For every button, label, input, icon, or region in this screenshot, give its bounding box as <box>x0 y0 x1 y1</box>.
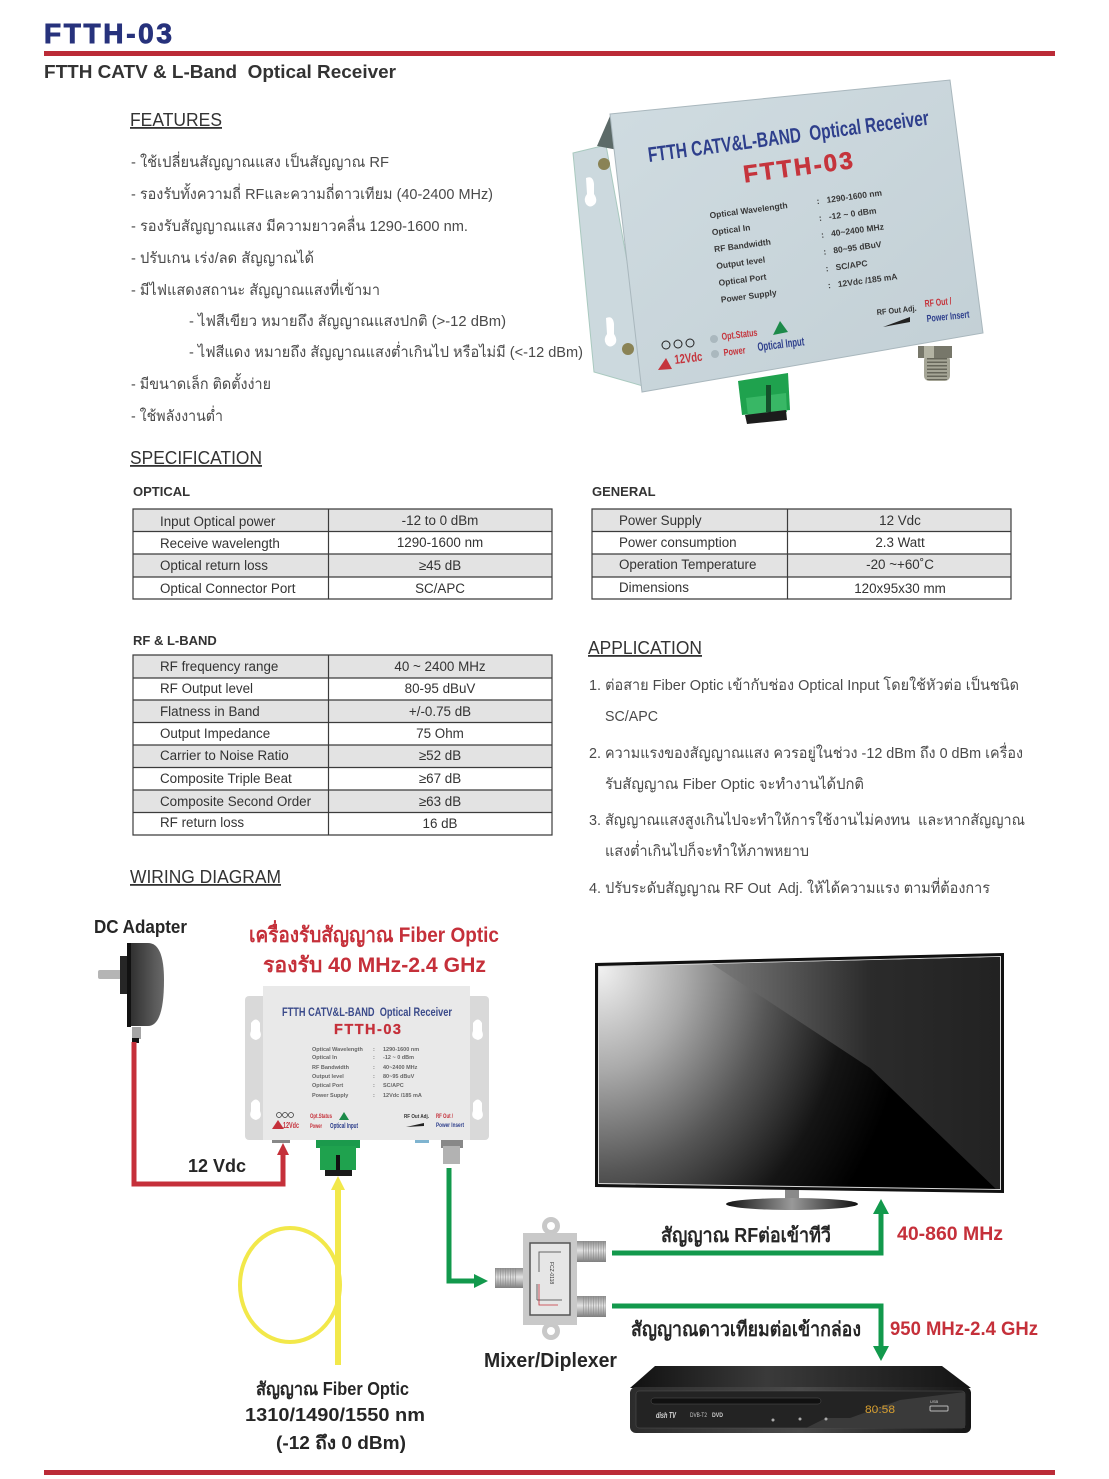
table: rf and l-band: 80-95 dBuV <box>405 681 475 696</box>
printed panel text: Output level <box>716 255 766 271</box>
table: rf and l-band: RF return loss <box>160 815 244 830</box>
table: rf and l-band: 75 Ohm <box>416 726 464 741</box>
heading: receiver caption: เครื่องรับสัญญาณ Fiber Optic <box>249 919 499 948</box>
icon: set top box: 80:58 <box>865 1404 895 1416</box>
panel labels: 12Vdc, status, input: RF Out Adj. <box>876 304 917 317</box>
table: optical: 1290-1600 nm <box>397 535 483 550</box>
title: FTTH-03: FTTH-03 <box>44 18 172 49</box>
printed panel text: Optical Wavelength <box>709 200 788 220</box>
table: optical: SC/APC <box>415 581 465 596</box>
feature list: - มีไฟแสดงสถานะ สัญญาณแสงที่เข้ามา <box>131 279 380 299</box>
panel labels: 12Vdc, status, input: RF Out / <box>924 296 952 310</box>
label: mixer diplexer: Mixer/Diplexer <box>484 1350 617 1372</box>
printed panel text: Optical In <box>711 222 751 237</box>
printed panel text <box>647 107 949 312</box>
application steps: SC/APC <box>605 708 658 725</box>
icon: set top box: DVD <box>712 1413 724 1419</box>
device: optical receiver front view: Optical Input <box>330 1123 358 1130</box>
printed panel text: RF Bandwidth <box>713 237 771 254</box>
table: general: 12 Vdc <box>879 513 921 528</box>
feature list: - มีขนาดเล็ก ติดตั้งง่าย <box>131 373 271 393</box>
heading: features: FEATURES <box>130 110 222 130</box>
printed panel text: : <box>818 213 823 223</box>
table: rf and l-band: RF Output level <box>160 681 253 696</box>
icon: set top box <box>630 1366 971 1433</box>
device: optical receiver front view: SC/APC <box>383 1083 404 1089</box>
feature list <box>131 151 583 425</box>
device: optical receiver front view: Optical Wavelength <box>312 1047 363 1053</box>
printed panel text: : <box>827 280 832 290</box>
table: optical: Optical Connector Port <box>160 581 296 596</box>
device: optical receiver front view: : <box>373 1055 375 1061</box>
printed panel text: : <box>823 246 827 257</box>
printed panel text: -12 ~ 0 dBm <box>828 205 877 222</box>
printed panel text: FTTH CATV&L-BAND Optical Receiver <box>647 107 930 167</box>
table: rf and l-band: 16 dB <box>422 816 458 831</box>
application steps: 2. ความแรงของสัญญาณแสง ควรอยู่ในช่วง -12 dBm ถึง 0 dBm เครื่อง <box>589 742 1023 762</box>
feature list: - ใช้พลังงานต่ำ <box>131 405 223 425</box>
table: general <box>592 484 1011 599</box>
table: optical <box>133 484 552 599</box>
table: rf and l-band: RF & L-BAND <box>133 633 217 648</box>
table: rf and l-band: Composite Triple Beat <box>160 771 292 786</box>
device: optical receiver front view: : <box>373 1093 375 1099</box>
table: optical: OPTICAL <box>133 484 190 499</box>
subtitle: FTTH CATV & L-Band Optical Receiver <box>44 61 396 82</box>
feature list: - ใช้เปลี่ยนสัญญาณแสง เป็นสัญญาณ RF <box>131 151 389 171</box>
application steps: แสงต่ำเกินไปก็จะทำให้ภาพหยาบ <box>605 840 809 860</box>
table: rf and l-band: Output Impedance <box>160 726 270 741</box>
mounting flange <box>573 145 650 388</box>
device: optical receiver front view: RF Out / <box>436 1113 453 1120</box>
printed panel text: 1290-1600 nm <box>826 187 883 205</box>
device: optical receiver front view: Optical Port <box>312 1083 343 1089</box>
application steps: 3. สัญญาณแสงสูงเกินไปจะทำให้การใช้งานไม่คงทน และหากสัญญาณ <box>589 811 1025 829</box>
table: general: GENERAL <box>592 484 656 499</box>
panel: application <box>588 638 1025 897</box>
device: optical receiver front view: Power <box>310 1124 322 1130</box>
heading: wiring diagram: WIRING DIAGRAM <box>130 867 281 887</box>
enclosure body <box>610 80 983 392</box>
device: optical receiver front view: 40~2400 MHz <box>383 1065 418 1071</box>
label: fiber optic input <box>245 1379 425 1453</box>
label: rf to tv: สัญญาณ RFต่อเข้าทีวี <box>661 1224 831 1247</box>
device: optical receiver front view: -12 ~ 0 dBm <box>383 1055 414 1061</box>
table: rf and l-band: Flatness in Band <box>160 704 260 719</box>
device: optical receiver front view: Output level <box>312 1074 344 1080</box>
icon: set top box: DVB-T2 <box>690 1413 708 1419</box>
printed panel text: : <box>825 263 829 274</box>
table: general: Dimensions <box>619 580 689 595</box>
device: optical receiver front view: Power Supply <box>312 1093 349 1099</box>
table: rf and l-band: 40 ~ 2400 MHz <box>394 659 486 674</box>
feature list: - รองรับสัญญาณแสง มีความยาวคลื่น 1290-1600 nm. <box>131 215 468 235</box>
table: general: Power Supply <box>619 513 702 528</box>
table: general: 2.3 Watt <box>875 535 925 550</box>
device: optical receiver front view: 12Vdc /185 mA <box>383 1093 422 1099</box>
device: optical receiver front view <box>245 986 489 1176</box>
table: rf and l-band: ≥52 dB <box>419 748 461 763</box>
icon: television <box>595 953 1004 1210</box>
printed panel text: Power Supply <box>720 287 777 305</box>
F connector <box>918 346 952 381</box>
feature list: - ปรับเกน เร่ง/ลด สัญญาณได้ <box>131 249 314 267</box>
panel: wiring diagram <box>94 917 1038 1453</box>
table: optical: Input Optical power <box>160 514 276 529</box>
icon: dc adapter <box>98 943 164 1043</box>
panel: specification <box>130 448 1011 835</box>
device: optical receiver front view: FTTH CATV&L-BAND Optical Receiver <box>282 1005 452 1019</box>
icon: yellow fiber coil <box>240 1228 340 1342</box>
arrow: green to television <box>612 1199 889 1253</box>
footer red rule <box>44 1470 1055 1475</box>
product photo: optical receiver <box>573 80 983 424</box>
application steps <box>589 675 1025 897</box>
arrow: 12 Vdc red cable <box>134 1042 289 1184</box>
table: optical: ≥45 dB <box>419 558 461 573</box>
heading: application: APPLICATION <box>588 638 702 658</box>
label: 40-860 MHz: 40-860 MHz <box>897 1224 1003 1245</box>
heading: receiver caption: รองรับ 40 MHz-2.4 GHz <box>263 954 486 977</box>
arrow: green from receiver to mixer <box>449 1168 488 1288</box>
panel labels: 12Vdc, status, input <box>658 296 971 370</box>
arrow: yellow fiber <box>331 1176 345 1365</box>
label: dc adapter: DC Adapter <box>94 917 187 937</box>
printed panel text: 80~95 dBuV <box>833 239 882 255</box>
printed panel text: 12Vdc /185 mA <box>837 271 898 289</box>
feature list: - รองรับทั้งความถี่ RFและความถี่ดาวเทียม (40-2400 MHz) <box>131 183 493 203</box>
label: 950 MHz-2.4 GHz: 950 MHz-2.4 GHz <box>890 1319 1038 1340</box>
table: optical: Receive wavelength <box>160 536 280 551</box>
device: optical receiver front view: RF Bandwidth <box>312 1065 350 1071</box>
table: rf and l-band: +/-0.75 dB <box>409 704 471 719</box>
table: optical: -12 to 0 dBm <box>402 513 478 528</box>
table: optical: Optical return loss <box>160 558 268 573</box>
label: fiber optic input: 1310/1490/1550 nm <box>245 1405 425 1425</box>
header red rule <box>44 51 1055 56</box>
device: optical receiver front view: RF Out Adj. <box>404 1114 430 1120</box>
table: general: Power consumption <box>619 535 737 550</box>
table: general: -20 ~+60˚C <box>866 557 934 572</box>
feature list: - ไฟสีเขียว หมายถึง สัญญาณแสงปกติ (>-12 dBm) <box>189 312 506 330</box>
device: optical receiver front view: FTTH-03 <box>334 1022 401 1038</box>
table: general: Operation Temperature <box>619 557 756 572</box>
device: optical receiver front view: : <box>373 1065 375 1071</box>
label: fiber optic input: สัญญาณ Fiber Optic <box>256 1379 409 1400</box>
feature list: - ไฟสีแดง หมายถึง สัญญาณแสงต่ำเกินไป หรือไม่มี (<-12 dBm) <box>189 341 583 361</box>
panel labels: 12Vdc, status, input: Power <box>723 345 746 359</box>
printed panel text: Optical Port <box>718 272 767 288</box>
panel labels: 12Vdc, status, input: Optical Input <box>757 334 805 354</box>
table: general: 120x95x30 mm <box>854 581 946 596</box>
green SC connector <box>316 1140 360 1176</box>
green SC connector <box>738 373 790 424</box>
F connector <box>441 1140 463 1164</box>
table: rf and l-band <box>133 633 552 835</box>
printed panel text: : <box>820 230 825 240</box>
table: rf and l-band: ≥63 dB <box>419 794 461 809</box>
printed panel text: SC/APC <box>835 258 868 272</box>
printed panel text: 40~2400 MHz <box>830 222 884 239</box>
application steps: 1. ต่อสาย Fiber Optic เข้ากับช่อง Optical Input โดยใช้หัวต่อ เป็นชนิด <box>589 675 1019 694</box>
panel labels: 12Vdc, status, input: Power Insert <box>926 309 971 325</box>
device: optical receiver front view: : <box>373 1074 375 1080</box>
panel labels: 12Vdc, status, input: 12Vdc <box>674 349 703 367</box>
label: fiber optic input: (-12 ถึง 0 dBm) <box>276 1433 406 1453</box>
printed panel text: FTTH-03 <box>742 147 854 188</box>
device: optical receiver front view: 12Vdc <box>283 1121 299 1130</box>
device: optical receiver front view: : <box>373 1083 375 1089</box>
icon: mixer diplexer: FCZ-0118 <box>548 1262 554 1284</box>
icon: mixer diplexer <box>495 1217 606 1340</box>
device: optical receiver front view: Optical In <box>312 1055 338 1061</box>
device: optical receiver front view: : <box>373 1047 375 1053</box>
device: optical receiver front view: Power Insert <box>436 1122 465 1129</box>
heading: receiver caption <box>249 919 499 977</box>
panel labels: 12Vdc, status, input: Opt.Status <box>721 328 758 343</box>
device: optical receiver front view: 1290-1600 nm <box>383 1047 419 1053</box>
table: rf and l-band: RF frequency range <box>160 659 278 674</box>
table: rf and l-band: ≥67 dB <box>419 771 461 786</box>
table: rf and l-band: Carrier to Noise Ratio <box>160 748 289 763</box>
device: optical receiver front view: 80~95 dBuV <box>383 1074 415 1080</box>
icon: set top box: dish TV <box>656 1411 676 1420</box>
printed panel text: : <box>816 196 820 206</box>
label: satellite to box: สัญญาณดาวเทียมต่อเข้ากล่อง <box>631 1318 861 1341</box>
label: 12 Vdc: 12 Vdc <box>188 1156 246 1176</box>
device: optical receiver front view: Opt.Status <box>310 1114 332 1120</box>
heading: specification: SPECIFICATION <box>130 448 262 468</box>
panel: features <box>130 110 583 425</box>
table: rf and l-band: Composite Second Order <box>160 794 312 809</box>
arrow: green to set top box <box>612 1306 889 1361</box>
icon: set top box: USB <box>930 1399 939 1404</box>
application steps: 4. ปรับระดับสัญญาณ RF Out Adj. ให้ได้ความแรง ตามที่ต้องการ <box>589 877 990 897</box>
application steps: รับสัญญาณ Fiber Optic จะทำงานได้ปกติ <box>605 775 864 793</box>
